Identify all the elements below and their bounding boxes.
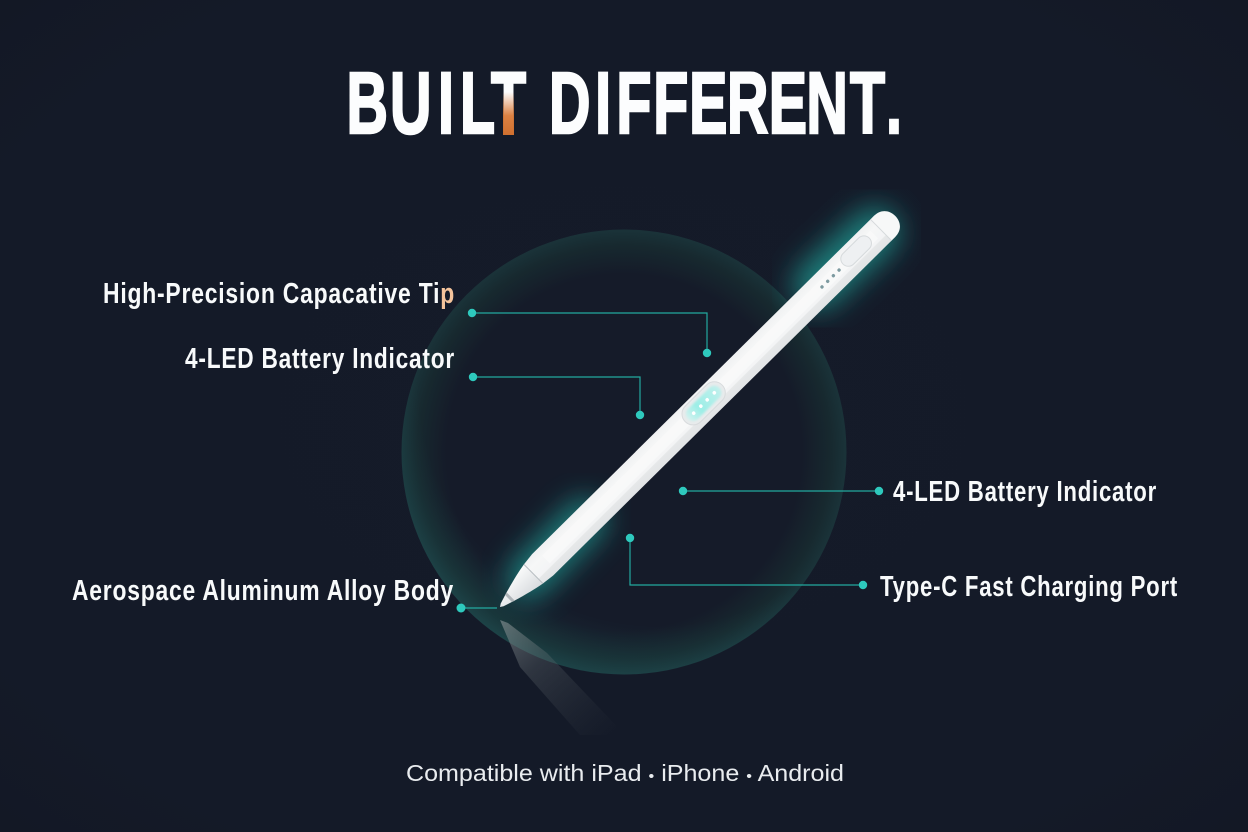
tip band — [504, 592, 515, 603]
small indicator dots — [820, 268, 841, 289]
callout: 4-LED Battery Indicator right — [679, 476, 1157, 508]
teal glow: upper pen — [818, 232, 875, 285]
callout: Type-C Fast Charging Port — [626, 534, 1178, 603]
title: BUILT DIFFERENT. — [347, 54, 902, 152]
stylus pen — [489, 205, 906, 618]
callout: 4-LED Battery Indicator right: 4-LED Battery Indicator — [893, 476, 1157, 508]
callout: Aerospace Aluminum Alloy Body: Aerospace Aluminum Alloy Body — [72, 575, 454, 607]
cap seam — [870, 219, 892, 241]
callout: High-Precision Capacative Tip — [103, 278, 711, 357]
callout: 4-LED Battery Indicator left: 4-LED Battery Indicator — [185, 343, 455, 375]
collar seam — [524, 564, 543, 584]
teal glow: lower pen — [528, 520, 585, 578]
pen reflection — [500, 620, 625, 735]
callout: High-Precision Capacative Tip: High-Precision Capacative Tip — [103, 278, 455, 310]
barrel highlight — [542, 231, 878, 563]
pen tip cone — [491, 564, 543, 617]
LED pill — [677, 377, 730, 429]
pen barrel — [523, 219, 892, 585]
footer compatibility text: Compatible with iPad • iPhone • Android — [406, 760, 844, 786]
side button — [838, 233, 875, 269]
pen cap — [870, 205, 906, 241]
glow circle — [402, 230, 846, 674]
callout: 4-LED Battery Indicator left — [185, 343, 644, 419]
